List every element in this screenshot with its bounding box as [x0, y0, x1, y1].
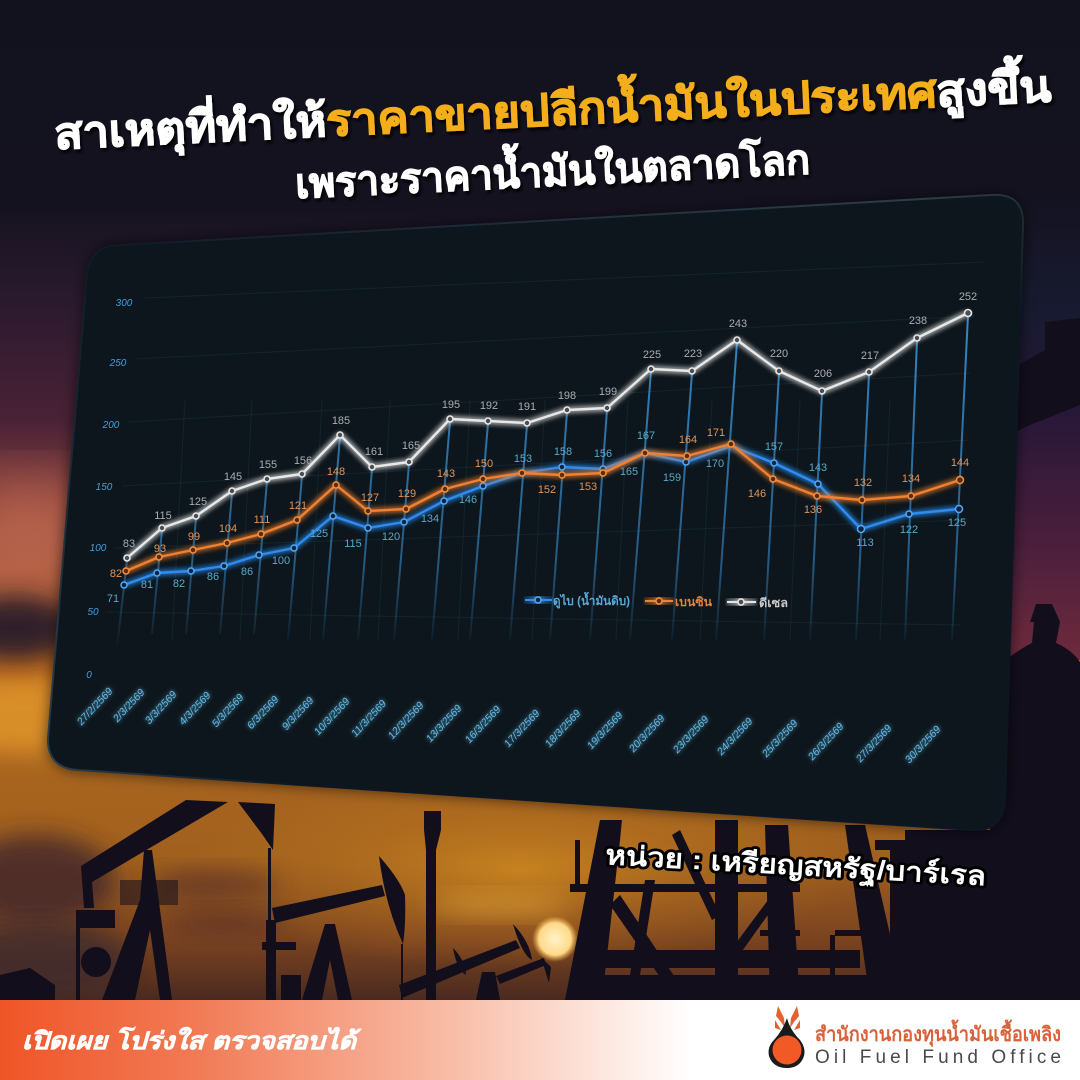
- series: gasoline: 127: [361, 492, 379, 504]
- series: diesel: 243: [729, 318, 747, 330]
- series: diesel: 156: [294, 455, 312, 467]
- x axis date labels: 30/3/2569: [903, 723, 943, 766]
- series: crude oil (Dubai): 82: [173, 578, 185, 590]
- x axis date labels: 10/3/2569: [312, 695, 352, 738]
- series: crude oil (Dubai): 71: [107, 593, 119, 605]
- y axis labels: 150: [96, 482, 113, 493]
- series: diesel: 195: [442, 399, 460, 411]
- series: gasoline: 93: [154, 543, 166, 555]
- x axis date labels: [75, 685, 943, 766]
- pump 2: [272, 885, 385, 923]
- title: [53, 53, 1052, 207]
- series: crude oil (Dubai): 115: [344, 538, 362, 550]
- series: gasoline: 82: [110, 568, 122, 580]
- series: crude oil (Dubai): 158: [554, 446, 572, 458]
- drilling rig: [565, 820, 622, 1000]
- unit note: หน่วย : เหรียญสหรัฐ/บาร์เรล: [604, 839, 987, 894]
- series: diesel: 191: [518, 401, 536, 413]
- series: gasoline: 129: [398, 488, 416, 500]
- series: crude oil (Dubai): 86: [241, 566, 253, 578]
- legend: เบนซิน: [675, 595, 713, 609]
- y axis labels: 100: [90, 543, 107, 554]
- series: diesel: 145: [224, 471, 242, 483]
- series: gasoline: 146: [748, 488, 766, 500]
- series: diesel: 165: [402, 440, 420, 452]
- legend: ดีเซล: [759, 596, 788, 610]
- series: gasoline: 153: [579, 481, 597, 493]
- series: gasoline: 143: [437, 468, 455, 480]
- series: diesel: [123, 291, 977, 561]
- y axis labels: 200: [102, 420, 120, 431]
- series: diesel: 199: [599, 386, 617, 398]
- series: gasoline: 134: [902, 473, 920, 485]
- y axis labels: 250: [109, 358, 127, 369]
- series: diesel: 125: [189, 496, 207, 508]
- series: diesel: 252: [959, 291, 977, 303]
- series: gasoline: 136: [804, 504, 822, 516]
- series: crude oil (Dubai): 146: [459, 494, 477, 506]
- series: crude oil (Dubai): 134: [421, 513, 439, 525]
- grid lines: [105, 262, 985, 640]
- series: gasoline: 132: [854, 477, 872, 489]
- pump 1: [81, 800, 228, 908]
- series: diesel: 238: [909, 315, 927, 327]
- series: gasoline: 148: [327, 466, 345, 478]
- series: crude oil (Dubai): 170: [706, 458, 724, 470]
- series: crude oil (Dubai): 156: [594, 448, 612, 460]
- series: crude oil (Dubai): 125: [948, 517, 966, 529]
- footer slogan: เปิดเผย โปร่งใส ตรวจสอบได้: [22, 1026, 362, 1055]
- x axis date labels: 20/3/2569: [627, 712, 667, 755]
- series: diesel: 83: [123, 538, 135, 550]
- x axis date labels: 3/3/2569: [143, 688, 179, 727]
- y axis labels: 300: [116, 298, 133, 309]
- chart panel: [48, 195, 1023, 830]
- x axis date labels: 23/3/2569: [671, 713, 711, 756]
- y axis labels: [86, 298, 133, 681]
- x axis date labels: 25/3/2569: [760, 717, 800, 760]
- series: crude oil (Dubai): 86: [207, 571, 219, 583]
- pump 4: [496, 958, 546, 984]
- x axis date labels: 19/3/2569: [585, 709, 625, 752]
- x axis date labels: 26/3/2569: [806, 720, 846, 763]
- central post: [424, 811, 441, 1000]
- series: diesel: 220: [770, 348, 788, 360]
- series: diesel: 217: [861, 350, 879, 362]
- x axis date labels: 5/3/2569: [210, 691, 246, 730]
- series: diesel: 192: [480, 400, 498, 412]
- series: crude oil (Dubai): 159: [663, 472, 681, 484]
- series: crude oil (Dubai): 120: [382, 531, 400, 543]
- series: gasoline: 111: [254, 514, 270, 526]
- series: diesel: 185: [332, 415, 350, 427]
- x axis date labels: 27/3/2569: [854, 722, 894, 765]
- x axis date labels: 11/3/2569: [350, 697, 389, 740]
- series: gasoline: 104: [219, 523, 237, 535]
- series: diesel: 161: [365, 446, 383, 458]
- x axis date labels: 6/3/2569: [245, 693, 281, 732]
- series: diesel: 155: [259, 459, 277, 471]
- series: gasoline: 164: [679, 434, 697, 446]
- title: เพราะราคาน้ำมันในตลาดโลก: [294, 129, 811, 207]
- vertical drop lines: [117, 315, 968, 648]
- series: diesel: 198: [558, 390, 576, 402]
- series: crude oil (Dubai): 122: [900, 524, 918, 536]
- x axis date labels: 4/3/2569: [177, 689, 213, 728]
- series: gasoline: [110, 427, 969, 580]
- x axis date labels: 13/3/2569: [424, 702, 464, 745]
- agency name english: Oil Fuel Fund Office: [815, 1047, 1061, 1068]
- silhouettes: pumpjacks, drilling rig and storage dome: [0, 318, 1080, 1000]
- x axis date labels: 16/3/2569: [463, 703, 503, 746]
- y axis labels: 50: [87, 607, 99, 618]
- agency name thai: สำนักงานกองทุนน้ำมันเชื้อเพลิง: [815, 1019, 1061, 1047]
- series: crude oil (Dubai): [107, 430, 966, 605]
- series: crude oil (Dubai): 143: [809, 462, 827, 474]
- icon: Oil Fuel Fund logo: [769, 1006, 804, 1068]
- series: gasoline: 99: [188, 531, 200, 543]
- x axis date labels: 27/2/2569: [75, 685, 115, 728]
- series: crude oil (Dubai): 165: [620, 466, 638, 478]
- series: diesel: 115: [154, 510, 172, 522]
- series: gasoline: 171: [707, 427, 725, 439]
- series: gasoline: 121: [289, 500, 307, 512]
- series: crude oil (Dubai): 81: [141, 579, 153, 591]
- series: gasoline: 150: [475, 458, 493, 470]
- x axis date labels: 12/3/2569: [386, 699, 426, 742]
- title: สาเหตุที่ทำให้ ราคาขายปลีกน้ำมันในประเทศ สูงขึ้น: [53, 53, 1052, 162]
- series: crude oil (Dubai): 125: [310, 528, 328, 540]
- series: diesel: 206: [814, 368, 832, 380]
- series: crude oil (Dubai): 157: [765, 441, 783, 453]
- series: gasoline: 152: [538, 484, 556, 496]
- series: diesel: 225: [643, 349, 661, 361]
- legend: ดูไบ (น้ำมันดิบ): [553, 591, 630, 609]
- x axis date labels: 18/3/2569: [543, 707, 583, 750]
- series: diesel: 223: [684, 348, 702, 360]
- series: crude oil (Dubai): 100: [272, 555, 290, 567]
- panel background: [48, 195, 1023, 830]
- legend: [525, 591, 788, 610]
- x axis date labels: 9/3/2569: [280, 694, 316, 733]
- y axis labels: 0: [86, 670, 92, 681]
- series: crude oil (Dubai): 113: [856, 537, 874, 549]
- x axis date labels: 24/3/2569: [715, 715, 755, 758]
- x axis date labels: 17/3/2569: [502, 707, 542, 750]
- series: gasoline: 144: [951, 457, 969, 469]
- footer bar: [0, 1000, 1080, 1080]
- series: crude oil (Dubai): 153: [514, 453, 532, 465]
- series: crude oil (Dubai): 167: [637, 430, 655, 442]
- x axis date labels: 2/3/2569: [111, 686, 147, 725]
- pump 3: [399, 940, 520, 998]
